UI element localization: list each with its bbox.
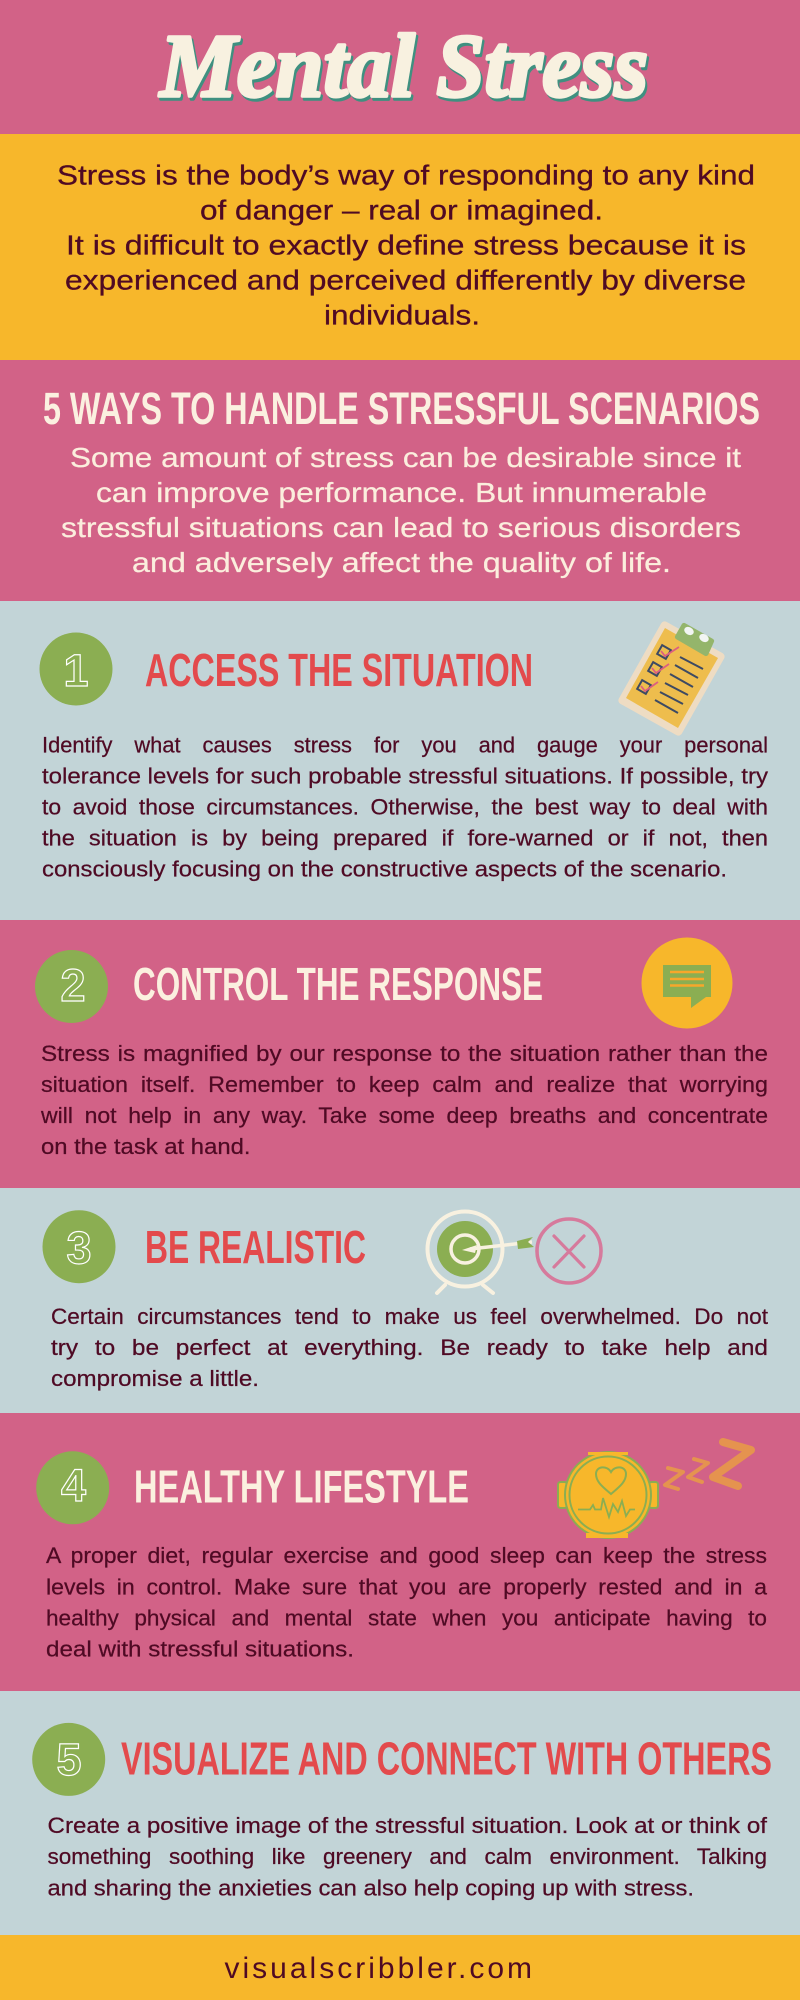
paragraph 2 (40, 1041, 768, 1159)
number badge 4: 4 (61, 1460, 86, 1511)
panel: stress definition (0, 134, 800, 360)
paragraph 2: on the task at hand. (41, 1134, 250, 1159)
title: Mental Stress (158, 17, 648, 116)
paragraph 1: to avoid those circumstances. Otherwise, the best way to deal with (42, 794, 768, 819)
paragraph 1: the situation is by being prepared if fore-warned or if not, then (42, 826, 768, 850)
paragraph 5: something soothing like greenery and calm environment. Talking (48, 1844, 767, 1869)
paragraph 5: Create a positive image of the stressful situation. Look at or think of (48, 1813, 768, 1838)
panel: stress definition: It is difficult to exactly define stress because it is (66, 230, 746, 260)
panel: five ways introduction (0, 360, 800, 601)
heading 1: ACCESS THE SITUATION (145, 644, 533, 696)
paragraph 5 (48, 1813, 768, 1900)
paragraph 4: deal with stressful situations. (46, 1637, 354, 1662)
panel: step 5 (0, 1691, 800, 1935)
panel: stress definition: individuals. (324, 300, 480, 330)
panel: stress definition: Stress is the body’s way of responding to any kind (57, 160, 755, 190)
paragraph 1: tolerance levels for such probable stressful situations. If possible, try (42, 763, 768, 788)
heading 4: HEALTHY LIFESTYLE (134, 1460, 469, 1512)
intro paragraph: and adversely affect the quality of life. (132, 547, 671, 578)
intro paragraph: stressful situations can lead to serious disorders (61, 512, 741, 543)
number badge 1 (40, 632, 112, 706)
paragraph 4: A proper diet, regular exercise and good sleep can keep the stress (46, 1543, 767, 1568)
icon: sleep letters (665, 1442, 751, 1489)
paragraph 4: healthy physical and mental state when you anticipate having to (46, 1606, 767, 1630)
panel: step 1 (0, 601, 800, 920)
paragraph 3: Certain circumstances tend to make us feel overwhelmed. Do not (51, 1304, 768, 1329)
panel: stress definition: of danger – real or imagined. (200, 194, 603, 226)
intro paragraph (61, 442, 741, 578)
heading 3: BE REALISTIC (145, 1221, 366, 1273)
paragraph 2: Stress is magnified by our response to the situation rather than the (41, 1041, 768, 1066)
paragraph 2: situation itself. Remember to keep calm and realize that worrying (41, 1072, 768, 1097)
icon: clipboard (622, 625, 721, 732)
paragraph 3: try to be perfect at everything. Be ready to take help and (51, 1335, 768, 1360)
number badge 3: 3 (66, 1222, 92, 1274)
number badge 1: 1 (63, 645, 89, 696)
icon: target and arrow (428, 1212, 601, 1293)
number badge 5: 5 (56, 1734, 82, 1785)
number badge 4 (36, 1451, 109, 1524)
panel: stress definition: experienced and perceived differently by diverse (65, 264, 746, 296)
panel: footer: visualscribbler.com (224, 1952, 532, 1985)
panel: footer (0, 1935, 800, 2000)
intro paragraph: can improve performance. But innumerable (96, 477, 707, 508)
panel: title banner (0, 0, 800, 134)
paragraph 4: levels in control. Make sure that you are properly rested and in a (46, 1574, 768, 1599)
paragraph 3: compromise a little. (51, 1366, 259, 1391)
paragraph 1 (42, 732, 768, 882)
panel: step 2 (0, 920, 800, 1188)
paragraph 3 (51, 1304, 768, 1391)
panel: step 4 (0, 1413, 800, 1691)
paragraph 4 (46, 1543, 768, 1662)
number badge 2: 2 (60, 960, 86, 1011)
intro paragraph: Some amount of stress can be desirable since it (70, 442, 741, 473)
icon: heart rate watch (558, 1452, 658, 1538)
icon: speech bubble (642, 938, 732, 1028)
heading 2: CONTROL THE RESPONSE (133, 958, 543, 1010)
number badge 2 (35, 950, 108, 1023)
number badge 3 (42, 1210, 116, 1283)
number badge 5 (32, 1723, 105, 1796)
panel: step 3 (0, 1188, 800, 1413)
paragraph 1: Identify what causes stress for you and gauge your personal (42, 732, 768, 757)
paragraph 2: will not help in any way. Take some deep breaths and concentrate (40, 1103, 768, 1128)
paragraph 5: and sharing the anxieties can also help coping up with stress. (48, 1875, 694, 1900)
paragraph 1: consciously focusing on the constructive aspects of the scenario. (42, 857, 727, 882)
